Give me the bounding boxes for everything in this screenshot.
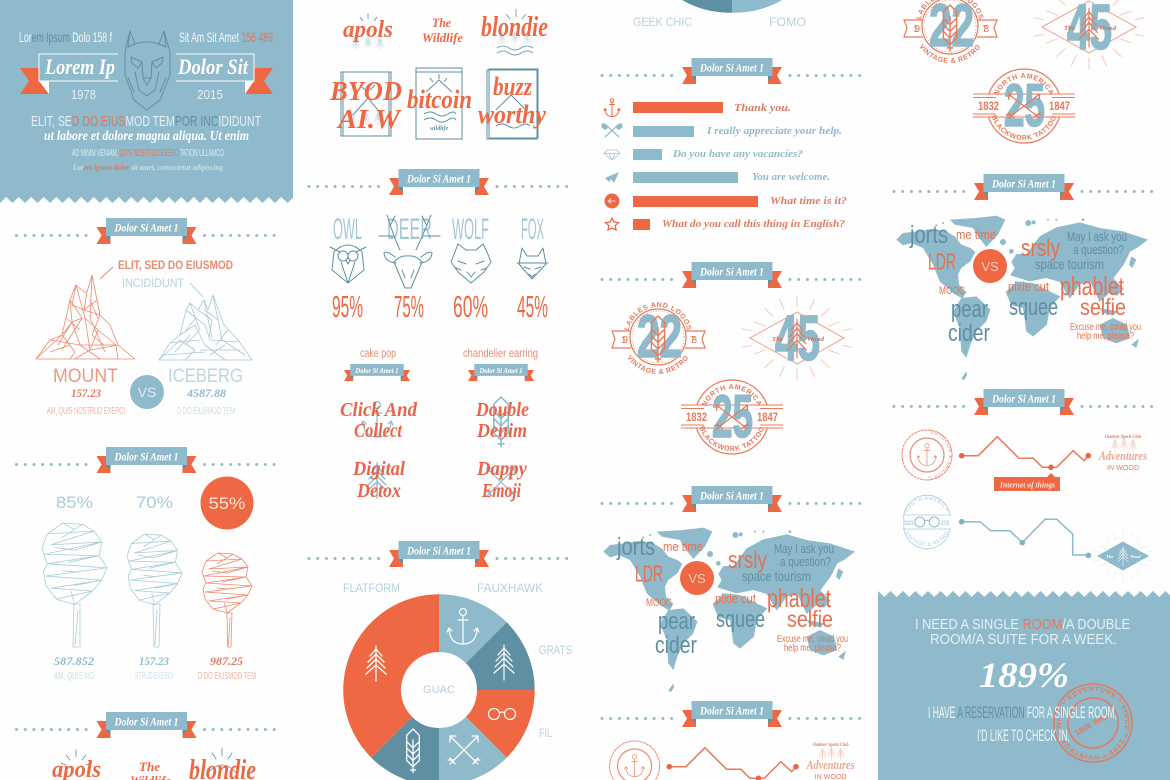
panel: world map words column three: a question? [780, 555, 831, 569]
panel: header banner: Lorem ipsum dolor sit amet, consectetur adipiscing [72, 163, 223, 172]
panel: world map words column four: a question? [1073, 243, 1124, 257]
badge: 25: BLACKWORK TATTOO [700, 426, 764, 451]
logo: crossed arrows: Emoji [481, 480, 521, 502]
badge: blue diamond [1093, 531, 1153, 581]
logo: adventures: IN WOOD [1107, 465, 1140, 472]
panel: bar chart [601, 99, 848, 230]
panel: world map words column four: pixie cut [1008, 279, 1049, 294]
panel: world map words column four: me time [956, 227, 996, 242]
panel: world map words column four: squee [1009, 294, 1058, 321]
callout: coral label [100, 258, 233, 279]
panel: small ribbons and typographic logos [340, 346, 538, 502]
panel: badges repeat column four [903, 0, 1145, 144]
panel: line chart partial column three [610, 741, 855, 780]
panel: world map words column three: May I ask you [774, 542, 834, 556]
panel: world map words column four [896, 216, 1148, 380]
icon: paper plane [605, 172, 619, 183]
panel: world map words column four: pear [951, 296, 988, 323]
left title ribbon: Lorem Ip [44, 54, 115, 79]
poster: card three [478, 69, 546, 139]
icon: round stamp: 1908 WILD [1073, 709, 1113, 737]
panel: mountain vs iceberg: ICEBERG [168, 366, 243, 387]
section ribbon [894, 174, 1155, 200]
section ribbon [602, 58, 863, 84]
badge: 22: 19 [913, 24, 920, 35]
icon: deer [379, 215, 440, 288]
panel: donut continuation column three [633, 0, 806, 29]
badge: 55 percent [200, 476, 254, 530]
badge: 25: 1847 [1049, 99, 1070, 113]
icon: back arrow circle [604, 194, 620, 208]
panel: donut chart: FIL [539, 726, 552, 740]
section ribbon: Dolor Si Amet 1 [406, 174, 471, 186]
bar row 4: You are welcome. [752, 171, 830, 183]
badge: 45 [1034, 0, 1144, 69]
panel: small ribbons and typographic logos: chandelier earring [463, 346, 538, 360]
panel: animals [330, 213, 548, 324]
small ribbon right [468, 364, 534, 381]
logo: adventures [1098, 434, 1147, 472]
panel: bottom callout: 189% [979, 655, 1069, 695]
bar row 4 [633, 171, 830, 183]
panel: header banner: ut labore et dolore magna aliqua. Ut enim [44, 129, 249, 144]
badge: 22: 22 [637, 303, 682, 370]
panel: line chart partial column three: Outdoor Sports Club [813, 742, 849, 748]
panel: world map words column four: phablet [1060, 271, 1125, 301]
panel: world map words column three: cider [655, 632, 697, 659]
panel: header banner: 2015 [197, 87, 223, 102]
right title ribbon: Dolor Sit [177, 54, 249, 79]
badge: 45 [742, 296, 852, 380]
icon: star [606, 218, 618, 230]
panel: mountain vs iceberg: MOUNT [53, 366, 118, 387]
panel: trees chart: 587.852 [54, 654, 94, 668]
panel: donut chart: GRATS [539, 643, 572, 657]
panel: world map words column three: Excuse me, could you [777, 633, 848, 645]
badge: glasses seal: SOUTH AMERICA [904, 496, 949, 512]
logo: the wildlife: Wildlife [422, 30, 463, 45]
panel: world map words column four: selfie [1080, 294, 1126, 320]
panel: world map words column four: May I ask you [1067, 230, 1127, 244]
section ribbon [602, 262, 863, 288]
badge: 22: 19 [621, 335, 628, 346]
panel: world map words column three: srsly [728, 547, 767, 574]
panel: mountain vs iceberg: 4587.88 [186, 386, 226, 400]
panel: trees chart: STRUD EXERCI [135, 671, 173, 682]
panel: line chart partial column three: Adventures [806, 757, 855, 772]
icon: VS circle [973, 249, 1007, 283]
section ribbon: Dolor Si Amet 1 [991, 178, 1056, 190]
icon: VS circle [680, 561, 714, 595]
poster: card three: buzz [493, 72, 533, 101]
icon: VS circle: VS [688, 571, 706, 586]
section ribbon [309, 541, 570, 567]
panel: trees chart: 157.23 [139, 654, 169, 668]
section ribbon [16, 712, 278, 738]
panel: animals: WOLF [452, 213, 489, 246]
poster: card one: BYOD [329, 76, 402, 106]
panel: world map words column three: LDR [635, 560, 663, 586]
panel: header banner: Lorem Ipsum Dolo 158 f [19, 29, 112, 45]
poster: card two: bitcoin [407, 85, 472, 114]
panel: animals: 95% [332, 289, 363, 324]
panel: trees chart [42, 476, 256, 682]
bar row 6: What do you call this thing in English? [662, 218, 846, 230]
logo: arrow: Digital [352, 458, 405, 480]
logo: the wildlife: The [432, 15, 451, 30]
panel: bottom callout: I'D LIKE TO CHECK IN. [977, 726, 1070, 745]
callout: coral label: ELIT, SED DO EIUSMOD [118, 258, 233, 272]
panel: donut continuation column three: FOMO [769, 15, 806, 29]
panel: world map words column three: MOOC [646, 597, 672, 609]
panel: vintage badges [611, 296, 853, 455]
badge: blue diamond: The [1106, 554, 1113, 559]
logo: feather: Double [475, 399, 529, 421]
panel: trees chart: 70% [136, 493, 173, 512]
callout: internet of things: Internet of things [999, 480, 1056, 490]
badge: glasses seal [903, 494, 951, 550]
panel: mountain vs iceberg: 157.23 [71, 386, 101, 400]
badge: glasses seal: VINTAGE & RETRO [906, 530, 948, 546]
panel: world map words column four: cider [948, 320, 990, 347]
logo: anchor: Click And [340, 399, 418, 421]
panel: header banner [0, 0, 293, 203]
section ribbon: Dolor Si Amet 1 [114, 222, 178, 234]
panel: world map words column three: pixie cut [715, 591, 756, 606]
badge: 55 percent: 55% [208, 494, 246, 513]
badge: 45: The [772, 336, 783, 343]
panel: world map words column four: srsly [1021, 235, 1060, 262]
section ribbon: Dolor Si Amet 1 [114, 716, 178, 728]
section ribbon: Dolor Si Amet 1 [699, 62, 764, 74]
poster: card three: worthy [478, 100, 546, 129]
callout: blue label: INCIDIDUNT [122, 276, 185, 290]
small ribbon left [344, 364, 410, 381]
panel: animals: 60% [453, 289, 488, 324]
logo: apols: apols [343, 17, 393, 43]
section ribbon [309, 169, 570, 195]
badge: 25 [681, 379, 783, 455]
panel: logos column two [329, 9, 548, 139]
panel: world map words column four: help me, please? [1077, 330, 1134, 342]
logo: blondie [481, 9, 548, 55]
bar row 5: What time is it? [770, 195, 848, 207]
logo: blondie: blondie [481, 12, 548, 43]
icon: tree small coral [202, 553, 252, 647]
section ribbon [16, 447, 278, 473]
panel: header banner: Sit Am Sit Amet 156 489 [179, 29, 273, 45]
logo: arrow [352, 458, 405, 502]
badge: 25: 1847 [757, 410, 778, 424]
badge: 25: 25 [1004, 72, 1045, 139]
icon: coral low-poly mountain [36, 275, 135, 359]
section ribbon: Dolor Si Amet 1 [699, 706, 764, 718]
panel: header banner: 1978 [71, 87, 96, 102]
icon: VS circle: VS [981, 259, 999, 274]
icon: wolf [451, 244, 491, 283]
icon: VS circle [130, 375, 164, 409]
badge: 25 [973, 68, 1075, 144]
badge: 45: Wood [1099, 25, 1117, 32]
badge: 22: LABLES AND LOGOS [624, 302, 692, 330]
panel: world map words column three: pear [658, 608, 695, 635]
panel: world map words column three: me time [663, 539, 703, 554]
logo: adventures: Adventures [1098, 448, 1147, 463]
section ribbon: Dolor Si Amet 1 [699, 490, 764, 502]
poster: card two [407, 68, 472, 139]
text: FOX [521, 213, 544, 246]
callout: internet of things [994, 473, 1060, 491]
icon: oars [601, 123, 623, 137]
panel: line charts column four [902, 430, 1154, 582]
icon: wolf head [125, 31, 170, 110]
line chart blue [959, 519, 1091, 558]
panel: animals: DEER [387, 213, 432, 246]
badge: 25: 1832 [978, 99, 999, 113]
panel: world map words column three: phablet [767, 583, 832, 613]
right title ribbon [176, 54, 273, 94]
icon: fox [517, 248, 548, 279]
panel: trees chart: AM, QUIS NO [54, 671, 94, 682]
panel: donut chart: FLATFORM [343, 581, 400, 595]
panel: world map words column four: space tourism [1035, 256, 1104, 272]
logo: arrow: Detox [356, 480, 401, 502]
badge: 25: NORTH AMERICA [994, 73, 1054, 96]
panel: world map words column four: MOOC [939, 285, 965, 297]
badge: 25: 1832 [686, 410, 707, 424]
section ribbon: Dolor Si Amet 1 [699, 266, 764, 278]
logo: crossed arrows: Dappy [476, 458, 527, 480]
bar row 1: Thank you. [734, 102, 791, 114]
badge: 25: NORTH AMERICA [702, 384, 762, 406]
badge: glasses seal: 1921 [904, 521, 915, 527]
section ribbon [894, 389, 1155, 415]
panel: mountain vs iceberg: AM, QUIS NOSTRUD EXERCI [47, 406, 125, 417]
panel: mountain vs iceberg: D DO EIUSMOD TEM [177, 406, 235, 417]
badge: blue diamond: Wood [1130, 554, 1141, 559]
panel: donut continuation column three: GEEK CHIC [633, 15, 692, 29]
icon: anchor [604, 99, 620, 116]
icon: tree medium [127, 534, 182, 647]
badge: 22 [903, 0, 998, 63]
panel: world map words column three: space tourism [742, 568, 811, 584]
badge: 22: VINTAGE & RETRO [920, 44, 980, 63]
panel: donut chart: GUAC [423, 684, 455, 696]
panel: small ribbons and typographic logos: cake pop [360, 346, 396, 360]
icon: round stamp: VINTAGE * WILD * ADVENTURE * SINCE * 1908 * HOTEL * [1056, 686, 1130, 760]
panel: donut chart: FAUXHAWK [477, 581, 543, 595]
badge: 25: 25 [712, 383, 753, 450]
icon: owl [330, 245, 366, 283]
badge: 22 [611, 302, 706, 374]
logo: crossed arrows [476, 458, 527, 502]
poster: card one: AI.W [336, 104, 402, 134]
panel: bottom callout: I NEED A SINGLE ROOM/A DOUBLE [915, 617, 1130, 633]
poster: card two: wildlife [430, 126, 448, 132]
bar row 2: I really appreciate your help. [706, 125, 842, 137]
section ribbon [602, 701, 863, 727]
panel: world map words column four: jorts [909, 221, 948, 249]
panel: header banner: AD MINIM VENIAM, QUIS NOSTRUD EXERCITATION ULLAMCO [72, 148, 224, 159]
logo: the wildlife [422, 15, 463, 45]
logo: feather [475, 397, 529, 447]
badge: anchor seal: OUTDOOR & SAILOR CLUB [928, 430, 952, 480]
badge: 22: 78 [982, 24, 989, 35]
panel: world map words column three [603, 528, 855, 692]
badge: 22: 78 [690, 335, 697, 346]
bar row 3: Do you have any vacancies? [672, 148, 804, 160]
badge: 45: 45 [775, 302, 820, 374]
logo: anchor: Collect [354, 420, 403, 442]
bar row 2 [633, 125, 842, 137]
panel: animals: OWL [333, 213, 362, 246]
badge: glasses seal: 2001 [940, 521, 951, 527]
panel: mountain vs iceberg [36, 258, 252, 417]
callout: blue label [122, 276, 203, 297]
panel: header banner: ELIT, SED DO EIUSMOD TEMPOR INCIDIDUNT [31, 114, 261, 130]
logo: anchor [340, 399, 418, 442]
panel: logos bottom of first column: The [139, 759, 160, 774]
panel: world map words column four: Excuse me, could you [1070, 321, 1141, 333]
donut segments [343, 594, 535, 780]
small ribbon left: Dolor Si Amet 1 [355, 366, 398, 375]
icon: blue low-poly mountain [159, 295, 252, 360]
icon: VS circle: VS [138, 384, 156, 400]
line chart coral [959, 437, 1091, 470]
panel: trees chart: D DO EIUSMOD TEM [198, 671, 256, 682]
panel: donut chart [343, 581, 572, 780]
poster: card one [329, 72, 402, 136]
panel: world map words column three: selfie [787, 606, 833, 632]
left title ribbon [20, 54, 118, 94]
section ribbon [16, 218, 278, 244]
icon: tree large [42, 523, 107, 647]
section ribbon: Dolor Si Amet 1 [406, 546, 471, 558]
panel: world map words column three: squee [716, 606, 765, 633]
panel: world map words column three: jorts [616, 533, 655, 561]
text: 45% [517, 289, 548, 324]
logo: apols [343, 13, 393, 49]
small ribbon right: Dolor Si Amet 1 [479, 366, 522, 375]
panel: trees chart: 85% [56, 493, 93, 512]
logo: adventures: Outdoor Sports Club [1105, 434, 1141, 440]
badge: 22: VINTAGE & RETRO [628, 354, 688, 374]
badge: 25: BLACKWORK TATTOO [992, 114, 1056, 140]
badge: anchor seal [902, 430, 952, 480]
panel: animals: 75% [394, 289, 424, 324]
section ribbon: Dolor Si Amet 1 [114, 452, 178, 464]
panel: logos bottom of first column [52, 748, 256, 780]
badge: 45: The [1064, 25, 1075, 32]
logo: feather: Denim [476, 420, 527, 442]
panel: trees chart: 987.25 [210, 654, 243, 668]
panel: bottom callout: ROOM/A SUITE FOR A WEEK. [930, 632, 1117, 648]
panel: world map words column three: help me, please? [784, 642, 841, 654]
panel: world map words column four: LDR [928, 248, 956, 274]
bar row 5 [633, 195, 848, 207]
icon: diamond [604, 150, 620, 160]
badge: 45: Wood [807, 336, 825, 343]
bar row 1 [633, 102, 791, 114]
section ribbon [602, 486, 863, 512]
section ribbon: Dolor Si Amet 1 [991, 394, 1056, 406]
